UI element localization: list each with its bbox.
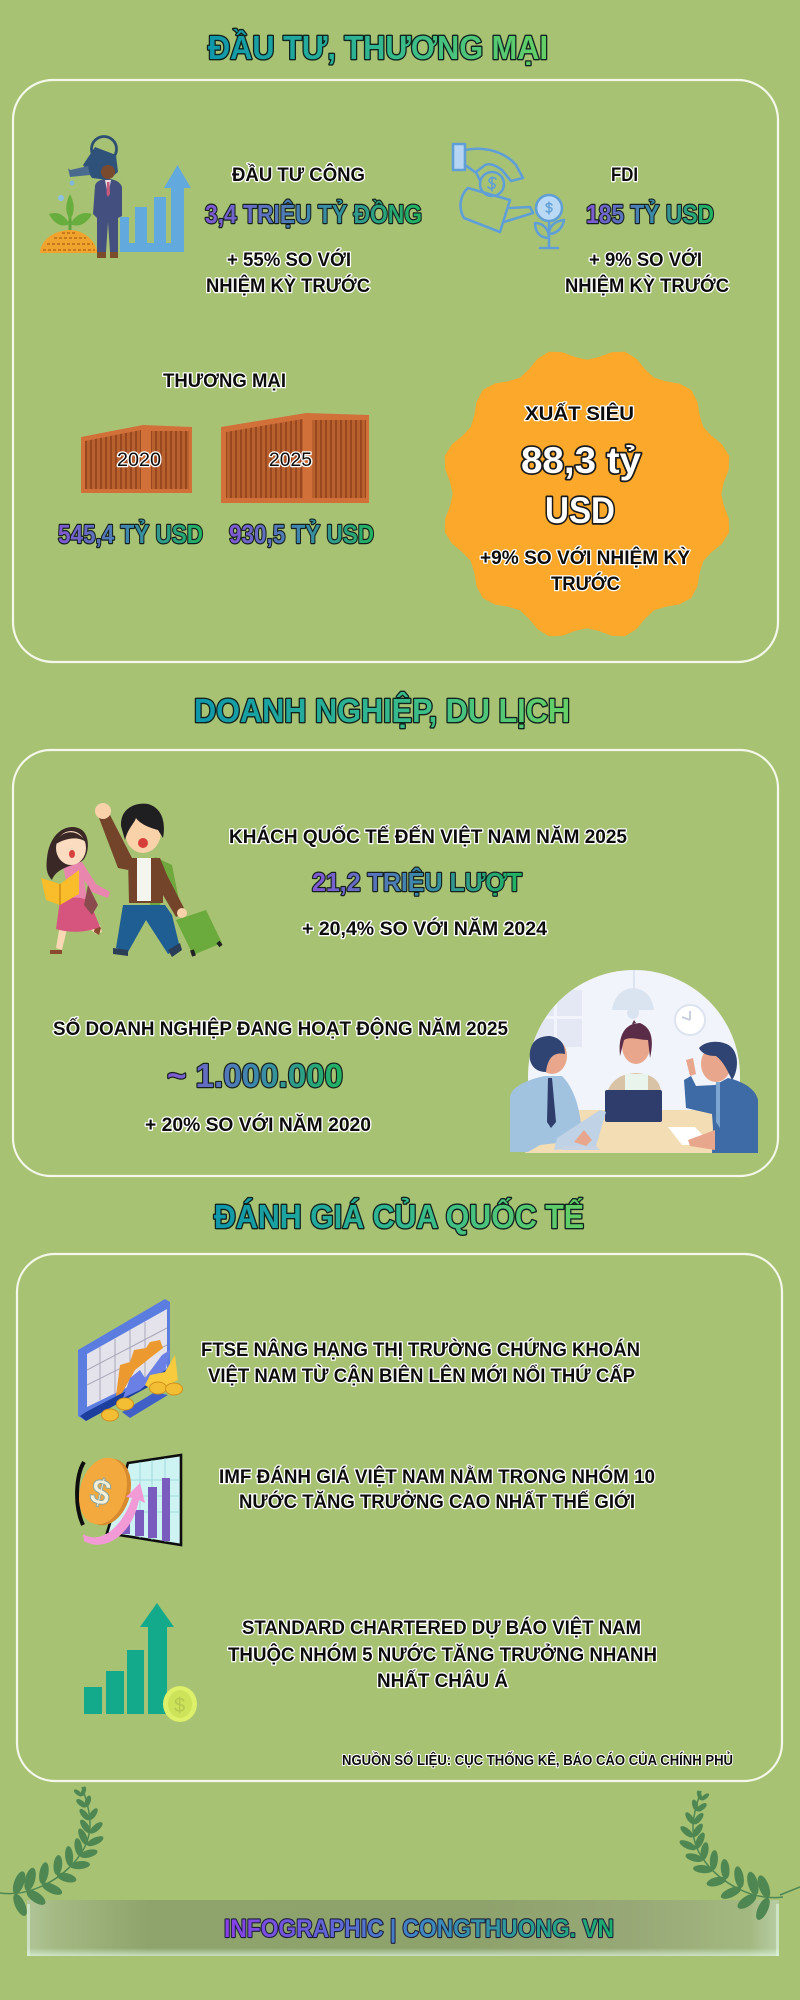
- icon: container 2020: [81, 425, 192, 493]
- laurel left: [0, 1786, 105, 1918]
- text: IMF assessment: IMF ĐÁNH GIÁ VIỆT NAM NẰM TRONG NHÓM 10: [219, 1464, 655, 1488]
- text: FTSE upgrade: VIỆT NAM TỪ CẬN BIÊN LÊN MỚI NỔI THỨ CẤP: [208, 1363, 635, 1387]
- note: FDI growth: [565, 247, 729, 297]
- value: surplus amount: 88,3 tỷ: [521, 440, 641, 481]
- note: FDI growth: + 9% SO VỚI: [589, 247, 702, 271]
- label: active businesses: SỐ DOANH NGHIỆP ĐANG HOẠT ĐỘNG NĂM 2025: [53, 1016, 508, 1040]
- label: public investment: ĐẦU TƯ CÔNG: [232, 162, 365, 186]
- panel: international assessment: [17, 1254, 782, 1781]
- value: trade 2025: 930,5 TỶ USD: [229, 519, 374, 549]
- label: 2020: 2020: [117, 449, 161, 471]
- callout: trade surplus: [446, 352, 728, 636]
- icon: rising bars and coin: [84, 1603, 197, 1722]
- icon: travelling couple: [41, 803, 222, 957]
- label: international visitors: KHÁCH QUỐC TẾ ĐẾN VIỆT NAM NĂM 2025: [229, 824, 627, 848]
- value: surplus amount: USD: [545, 490, 615, 531]
- laurel right: [678, 1790, 783, 1922]
- value: FDI: 185 TỶ USD: [586, 199, 714, 229]
- laurel right stem tip: [780, 1887, 800, 1895]
- icon glyph: dollar: $: [86, 1470, 115, 1514]
- note: surplus growth: TRƯỚC: [551, 571, 620, 595]
- value: public investment: 3,4 TRIỆU TỶ ĐỒNG: [205, 199, 422, 229]
- note: FDI growth: NHIỆM KỲ TRƯỚC: [565, 273, 729, 297]
- text: Standard Chartered forecast: NHẤT CHÂU Á: [377, 1668, 508, 1692]
- text: Standard Chartered forecast: THUỘC NHÓM 5 NƯỚC TĂNG TRƯỞNG NHANH: [228, 1642, 657, 1666]
- label: FDI: FDI: [611, 164, 638, 186]
- note: public investment growth: NHIỆM KỲ TRƯỚC: [206, 273, 370, 297]
- note: businesses growth: + 20% SO VỚI NĂM 2020: [145, 1112, 371, 1136]
- panel: business and tourism: [13, 750, 778, 1176]
- note: surplus growth: [480, 545, 690, 595]
- label: surplus: XUẤT SIÊU: [525, 401, 634, 425]
- text: Standard Chartered forecast: STANDARD CHARTERED DỰ BÁO VIỆT NAM: [242, 1615, 641, 1639]
- text: FTSE upgrade: [201, 1337, 640, 1387]
- icon: FDI hand, watering can and flower: [453, 144, 564, 248]
- value: surplus amount: [521, 440, 641, 531]
- panel: investment and trade: [13, 80, 778, 662]
- value: active businesses: ~ 1.000.000: [167, 1057, 343, 1094]
- heading: international assessment: ĐÁNH GIÁ CỦA QUỐC TẾ: [214, 1197, 584, 1235]
- icon: container 2025: [221, 413, 369, 503]
- text: FTSE upgrade: FTSE NÂNG HẠNG THỊ TRƯỜNG CHỨNG KHOÁN: [201, 1337, 640, 1361]
- value: international visitors: 21,2 TRIỆU LƯỢT: [312, 867, 522, 897]
- note: public investment growth: + 55% SO VỚI: [227, 247, 351, 271]
- label: 2025: 2025: [269, 449, 312, 471]
- label: trade: THƯƠNG MẠI: [163, 370, 286, 392]
- note: public investment growth: [206, 247, 370, 297]
- source note: NGUỒN SỐ LIỆU: CỤC THỐNG KÊ, BÁO CÁO CỦA CHÍNH PHỦ: [342, 1751, 733, 1769]
- heading: business and tourism: DOANH NGHIỆP, DU LỊCH: [194, 692, 570, 729]
- icon glyph: small dollar: $: [174, 1695, 185, 1717]
- icon: investor watering a plant: [40, 136, 191, 258]
- text: IMF assessment: NƯỚC TĂNG TRƯỞNG CAO NHẤT THẾ GIỚI: [239, 1489, 635, 1513]
- value: trade 2020: 545,4 TỶ USD: [58, 519, 203, 549]
- icon: stock market monitor: [78, 1299, 182, 1421]
- icon: coin and growth chart: [72, 1452, 181, 1545]
- text: Standard Chartered forecast: [228, 1615, 657, 1692]
- icon: office meeting: [510, 970, 758, 1153]
- note: visitors growth: + 20,4% SO VỚI NĂM 2024: [302, 916, 547, 940]
- footer text: INFOGRAPHIC | CONGTHUONG. VN: [224, 1915, 614, 1943]
- heading: investment and trade: ĐẦU TƯ, THƯƠNG MẠI: [208, 29, 548, 66]
- text: IMF assessment: [219, 1464, 655, 1513]
- footer banner: [27, 1900, 779, 1956]
- note: surplus growth: +9% SO VỚI NHIỆM KỲ: [480, 545, 690, 569]
